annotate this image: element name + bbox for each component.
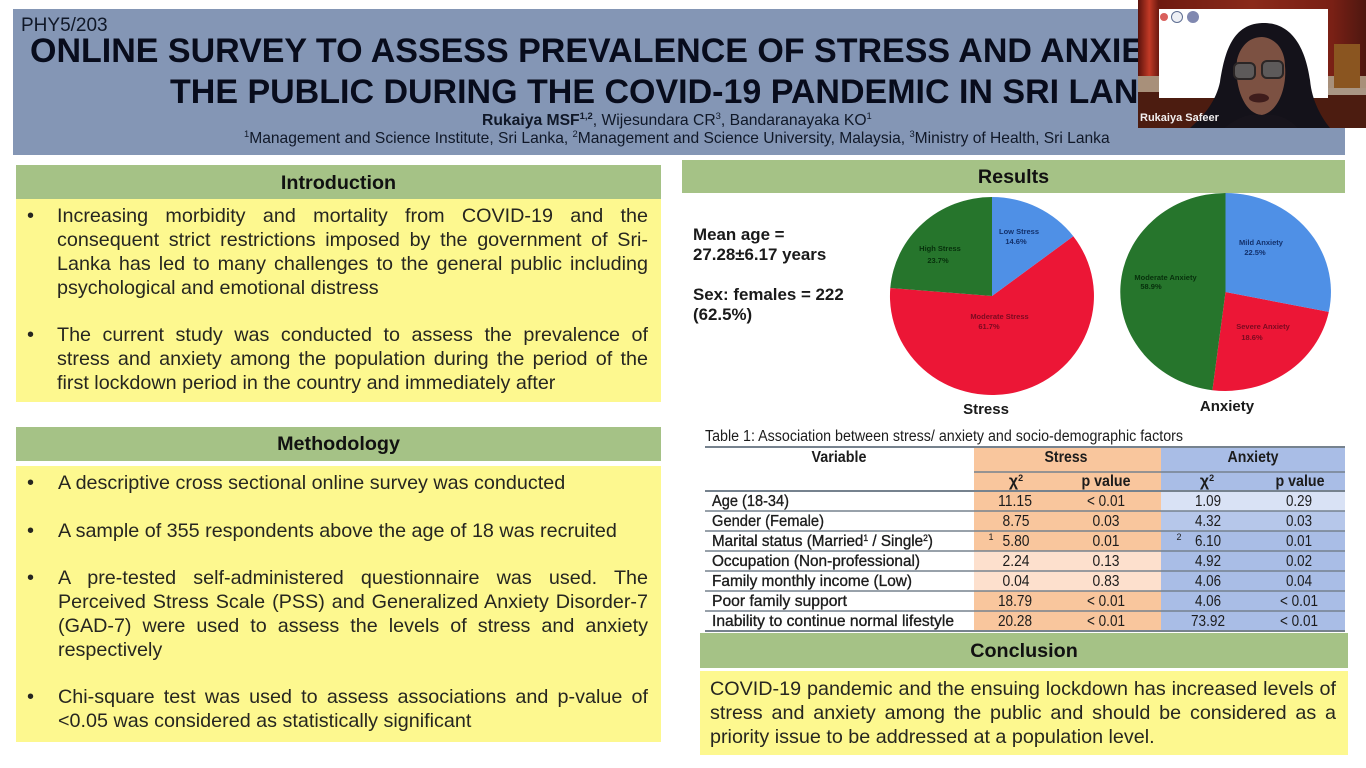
table values: 0.04 xyxy=(1286,573,1312,590)
methodology text: A descriptive cross sectional online survey was conducted xyxy=(58,472,565,494)
main title: ONLINE SURVEY TO ASSESS PREVALENCE OF STRESS AND ANXIETY AMONG xyxy=(30,32,1325,70)
table values: 5.80 xyxy=(1002,533,1030,550)
heading: introduction: Introduction xyxy=(281,172,396,194)
main title: THE PUBLIC DURING THE COVID-19 PANDEMIC IN SRI LANKA xyxy=(170,73,1188,111)
introduction text: psychological and emotional distress xyxy=(57,277,379,299)
table caption: Table 1: Association between stress/ anxiety and socio-demographic factors xyxy=(705,428,1183,445)
introduction text: stress and anxiety among the population during the period of the xyxy=(57,348,648,370)
row labels: 2 xyxy=(923,533,928,543)
conclusion text: priority issue to be addressed at a population level. xyxy=(710,726,1155,748)
stress slice labels: Moderate Stress xyxy=(970,312,1029,321)
anxiety slice labels: 22.5% xyxy=(1244,248,1266,257)
title banner xyxy=(13,9,1345,155)
demographics text: (62.5%) xyxy=(693,305,752,324)
table values: 18.79 xyxy=(998,593,1032,610)
row labels: Marital status (Married xyxy=(712,533,871,550)
presenter name: Rukaiya Safeer xyxy=(1140,112,1220,124)
introduction text: The current study was conducted to assess the prevalence of xyxy=(57,324,648,346)
methodology text: Chi-square test was used to assess associations and p-value of xyxy=(58,686,648,708)
stress slice labels: 61.7% xyxy=(978,322,1000,331)
chart: stress pie xyxy=(890,197,1094,418)
table headers: χ xyxy=(1200,473,1209,490)
heading: methodology xyxy=(16,427,661,461)
webcam video overlay xyxy=(1138,0,1366,128)
table values: 20.28 xyxy=(998,613,1032,630)
panel: conclusion xyxy=(700,633,1348,755)
introduction text xyxy=(16,199,661,402)
panel: methodology xyxy=(16,427,661,742)
chart: anxiety pie xyxy=(1120,193,1331,415)
methodology text: Perceived Stress Scale (PSS) and Generalized Anxiety Disorder-7 xyxy=(58,591,648,613)
anxiety caption: Anxiety xyxy=(1200,398,1255,415)
room background xyxy=(1138,0,1366,128)
methodology text: • xyxy=(27,472,34,494)
slice: severe anxiety xyxy=(1212,292,1329,391)
table headers: Anxiety xyxy=(1228,449,1279,466)
table values: 0.03 xyxy=(1092,513,1120,530)
table values: 1.09 xyxy=(1195,493,1221,510)
demographics text: Mean age = xyxy=(693,225,785,244)
table values: < 0.01 xyxy=(1087,493,1125,510)
anxiety slice labels: Moderate Anxiety xyxy=(1134,273,1197,282)
table values: 0.13 xyxy=(1092,553,1120,570)
stress slice labels xyxy=(919,227,1039,331)
introduction text: Lanka has led to many challenges to the general public including xyxy=(57,253,648,275)
row labels: Poor family support xyxy=(712,593,848,610)
introduction text: consequent strict restrictions imposed by the government of Sri- xyxy=(57,229,648,251)
methodology text: • xyxy=(27,686,34,708)
table values xyxy=(988,493,1318,630)
row labels: Gender (Female) xyxy=(712,513,824,530)
introduction text: Increasing morbidity and mortality from COVID-19 and the xyxy=(57,205,648,227)
row labels: 1 xyxy=(863,533,868,543)
table headers: p value xyxy=(1082,473,1131,490)
methodology text: (GAD-7) were used to assess the levels of stress and anxiety xyxy=(58,615,648,637)
table values: 4.32 xyxy=(1195,513,1221,530)
row labels xyxy=(712,493,954,630)
anxiety slice labels xyxy=(1134,238,1291,342)
slice: moderate anxiety xyxy=(1120,193,1226,390)
table rules xyxy=(705,447,1345,631)
methodology text xyxy=(16,466,661,742)
table values: 0.04 xyxy=(1002,573,1030,590)
anxiety slice labels: 58.9% xyxy=(1140,282,1162,291)
conclusion text xyxy=(700,671,1348,755)
stress caption: Stress xyxy=(963,401,1009,418)
table headers: Stress xyxy=(1044,449,1088,466)
table headers: χ xyxy=(1009,473,1018,490)
table headers: Variable xyxy=(812,449,867,466)
slice: high stress xyxy=(890,197,992,296)
introduction text: • xyxy=(27,324,34,346)
demographics text: 27.28±6.17 years xyxy=(693,245,826,264)
row labels: Inability to continue normal lifestyle xyxy=(712,613,954,630)
poster code: PHY5/203 xyxy=(21,15,108,36)
table values: < 0.01 xyxy=(1087,593,1125,610)
demographics text: Sex: females = 222 xyxy=(693,285,844,304)
heading: introduction xyxy=(16,165,661,199)
presenter xyxy=(1190,23,1330,128)
slice: moderate stress xyxy=(890,236,1094,395)
table values: 1 xyxy=(988,532,994,542)
conclusion text: stress and anxiety among the public and should be considered as a xyxy=(710,702,1336,724)
table headers: 2 xyxy=(1209,473,1214,483)
anxiety slice labels: Mild Anxiety xyxy=(1239,238,1284,247)
table values: < 0.01 xyxy=(1280,613,1318,630)
row labels: Age (18-34) xyxy=(712,493,789,510)
heading: results xyxy=(682,160,1345,193)
table values: 73.92 xyxy=(1191,613,1225,630)
methodology text: • xyxy=(27,520,34,542)
affiliations: 1Management and Science Institute, Sri Lanka, 2Management and Science University, Malaysia, 3Ministry of Health, Sri Lanka xyxy=(244,129,1110,147)
heading: conclusion: Conclusion xyxy=(970,640,1078,662)
introduction text: first lockdown period in the country and immediately after xyxy=(57,372,555,394)
table cell shading xyxy=(974,447,1345,632)
table values: 0.83 xyxy=(1092,573,1120,590)
table values: 11.15 xyxy=(998,493,1032,510)
methodology text: • xyxy=(27,567,34,589)
table values: < 0.01 xyxy=(1280,593,1318,610)
table values: 0.01 xyxy=(1092,533,1120,550)
stress slice labels: Low Stress xyxy=(999,227,1039,236)
heading: results: Results xyxy=(978,166,1049,188)
table values: 2.24 xyxy=(1002,553,1030,570)
table values: 8.75 xyxy=(1002,513,1030,530)
table values: 4.06 xyxy=(1195,593,1221,610)
table values: 0.01 xyxy=(1286,533,1312,550)
panel: introduction xyxy=(16,165,661,402)
heading: conclusion xyxy=(700,633,1348,668)
demographics text xyxy=(693,225,844,324)
methodology text: respectively xyxy=(58,639,162,661)
table headers: 2 xyxy=(1018,473,1023,483)
table values: 4.06 xyxy=(1195,573,1221,590)
table values: 6.10 xyxy=(1195,533,1221,550)
table: association between stress, anxiety and socio-demographic factors xyxy=(705,428,1345,632)
table values: 2 xyxy=(1176,532,1182,542)
stress slice labels: High Stress xyxy=(919,244,961,253)
row labels: Occupation (Non-professional) xyxy=(712,553,920,570)
introduction text: • xyxy=(27,205,34,227)
table values: 0.02 xyxy=(1286,553,1312,570)
anxiety slice labels: Severe Anxiety xyxy=(1236,322,1291,331)
slice: low stress xyxy=(992,197,1073,296)
methodology text: A sample of 355 respondents above the age of 18 was recruited xyxy=(58,520,617,542)
table headers: p value xyxy=(1276,473,1325,490)
slice: mild anxiety xyxy=(1226,193,1331,312)
table values: < 0.01 xyxy=(1087,613,1125,630)
table values: 4.92 xyxy=(1195,553,1221,570)
table values: 0.29 xyxy=(1286,493,1312,510)
conclusion text: COVID-19 pandemic and the ensuing lockdown has increased levels of xyxy=(710,678,1336,700)
presentation slide behind presenter xyxy=(1159,9,1328,98)
anxiety slice labels: 18.6% xyxy=(1241,333,1263,342)
main title xyxy=(30,32,1325,111)
methodology text: A pre-tested self-administered questionnaire was used. The xyxy=(58,567,648,589)
row labels: Family monthly income (Low) xyxy=(712,573,912,590)
stress slice labels: 14.6% xyxy=(1005,237,1027,246)
methodology text: <0.05 was considered as statistically significant xyxy=(58,710,471,732)
authors: Rukaiya MSF1,2, Wijesundara CR3, Bandaranayaka KO1 xyxy=(482,110,872,129)
table headers xyxy=(812,449,1325,490)
stress slice labels: 23.7% xyxy=(927,256,949,265)
heading: methodology: Methodology xyxy=(277,433,400,455)
table values: 0.03 xyxy=(1286,513,1312,530)
row labels: / Single xyxy=(868,533,923,550)
row labels: ) xyxy=(928,533,933,550)
